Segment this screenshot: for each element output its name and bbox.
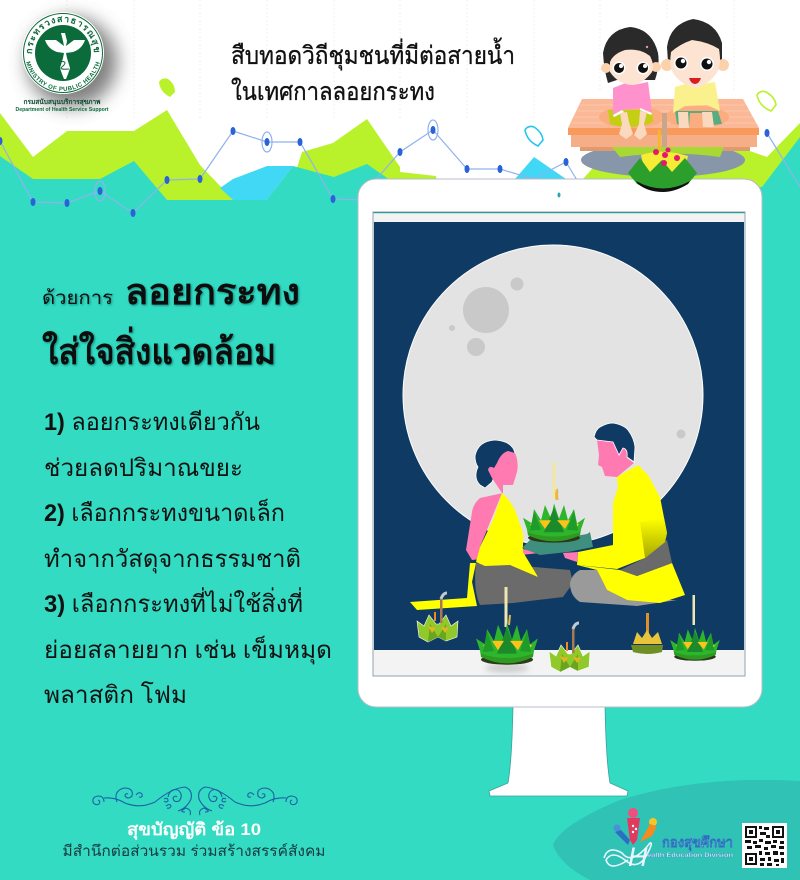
title [231,37,515,106]
logo caption: Department of Health Service Support [16,107,109,113]
body list: 3) เลือกกระทงที่ไม่ใช้สิ่งที่ [44,587,303,618]
heading: with krathong [42,271,300,372]
monitor body [358,179,762,707]
background chart: blue area [220,157,566,200]
cartoon children on pier [568,19,759,192]
Health Education Division logo: ealth Education Division [647,852,733,859]
logo: Ministry of Public Health [15,4,129,120]
decorative leaf shapes [159,78,776,146]
tray with krathong [522,462,593,562]
QR code [742,823,787,868]
body list: ย่อยสลายยาก เช่น เข็มหมุด [44,635,332,665]
woman [410,440,573,610]
heading: with krathong: ด้วยการ [42,288,113,309]
logo: Ministry of Public Health: กระทรวงสาธารณสุข [26,16,100,54]
line chart with nodes [0,120,800,217]
footer dark ellipse [553,780,800,880]
man [570,423,685,606]
Health Education Division logo: H [628,842,648,872]
boy [661,19,729,128]
heading: with krathong: ใส่ใจสิ่งแวดล้อม [42,326,276,372]
title: ในเทศกาลลอยกระทง [231,77,435,106]
heading: with krathong: ลอยกระทง [125,271,300,312]
front krathong [628,113,697,192]
Health Education Division logo: กองสุขศึกษา [662,834,733,851]
girl [601,27,661,140]
background chart: lime area [0,110,800,220]
floating krathongs [417,587,720,673]
footer motto: มีสำนึกต่อส่วนรวม ร่วมสร้างสรรค์สังคม [62,843,326,860]
footer motto [62,820,326,860]
footer ornament [93,787,297,815]
monitor stand [489,705,628,796]
logo: Ministry of Public Health: MINISTRY OF PUBLIC HEALTH [26,61,100,91]
Health Education Division logo [604,808,733,872]
body list: 1) ลอยกระทงเดียวกัน [44,409,260,436]
footer motto: สุขบัญญัติ ข้อ 10 [127,820,261,840]
pond [581,143,745,177]
logo caption [16,98,109,113]
logo caption: กรมสนับสนุนบริการสุขภาพ [24,98,101,106]
monitor camera dot [558,192,560,198]
body list: ช่วยลดปริมาณขยะ [44,455,243,482]
body list: 2) เลือกกระทงขนาดเล็ก [44,498,285,527]
title: สืบทอดวิถีชุมชนที่มีต่อสายน้ำ [231,37,515,71]
body list: พลาสติก โฟม [44,681,187,709]
pier [568,99,759,128]
body list [44,409,332,709]
illustration: lovers on moonlit night [373,212,745,676]
full moon [403,245,703,545]
body list: ทำจากวัสดุจากธรรมชาติ [44,546,301,574]
screen [373,212,745,676]
